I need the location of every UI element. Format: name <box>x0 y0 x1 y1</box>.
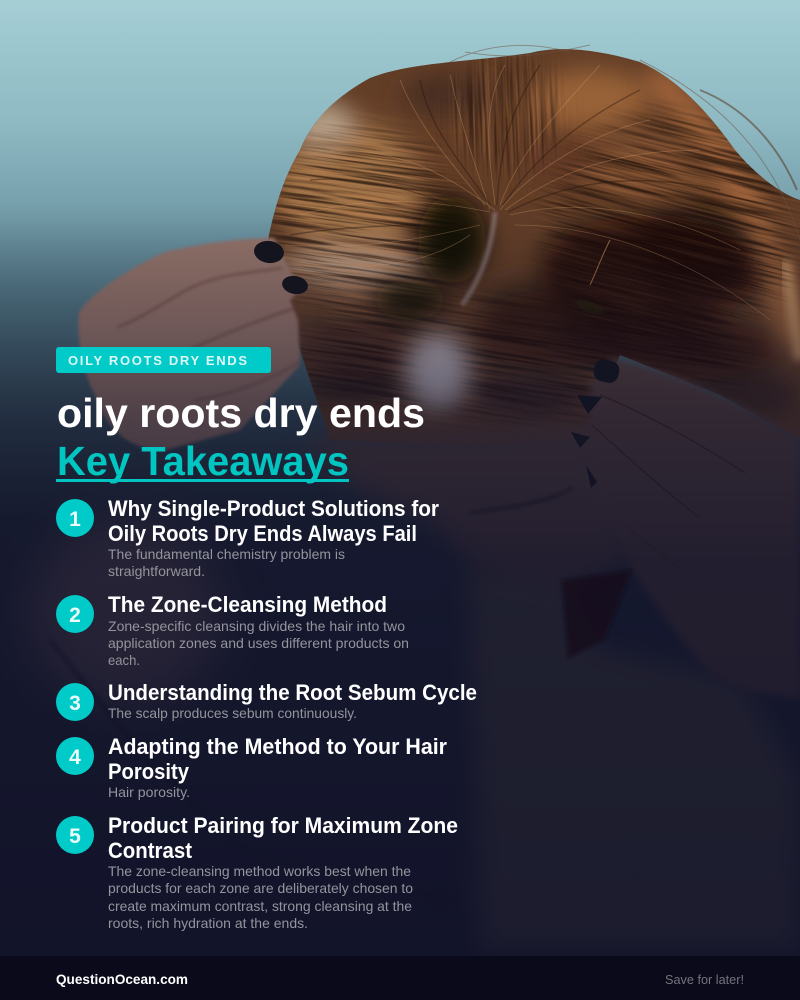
hair texture lower fan <box>300 295 742 418</box>
takeaway 5: create maximum contrast, strong cleansing at the <box>108 898 412 914</box>
crown shadow, parting and grey patch <box>374 196 495 410</box>
takeaway 3 <box>56 680 477 721</box>
takeaway 3: 3 <box>69 692 81 715</box>
takeaway 2: 2 <box>69 604 81 627</box>
right hand <box>582 358 800 700</box>
neck shadow <box>562 570 632 658</box>
takeaway 5: 5 <box>69 825 81 848</box>
takeaway 2 <box>56 592 409 668</box>
painted nails <box>253 239 621 488</box>
title: Key Takeaways <box>57 438 349 484</box>
takeaway 4: Porosity <box>108 759 190 784</box>
left hand <box>78 238 300 450</box>
takeaway 1: Why Single-Product Solutions for <box>108 496 439 521</box>
takeaway 1: The fundamental chemistry problem is <box>108 546 345 562</box>
footer bar: Save for later! <box>665 972 744 987</box>
takeaway 3: The scalp produces sebum continuously. <box>108 705 357 721</box>
takeaway 3: Understanding the Root Sebum Cycle <box>108 680 477 705</box>
hair texture left fan <box>268 118 458 320</box>
takeaway 1: straightforward. <box>108 563 205 579</box>
takeaway 2: The Zone-Cleansing Method <box>108 592 387 617</box>
takeaway 2: each. <box>108 652 140 668</box>
takeaway 1: 1 <box>69 508 81 531</box>
footer bar <box>0 956 800 1000</box>
flyaway hairs <box>450 45 800 240</box>
takeaway 5: Contrast <box>108 838 193 863</box>
hair texture right fan <box>536 103 800 331</box>
takeaway 1: Oily Roots Dry Ends Always Fail <box>108 521 417 546</box>
takeaway 5: Product Pairing for Maximum Zone <box>108 813 458 838</box>
takeaway 2: Zone-specific cleansing divides the hair into two <box>108 618 405 634</box>
title: oily roots dry ends <box>57 390 425 436</box>
takeaway 5 <box>56 813 458 931</box>
hair <box>268 49 800 440</box>
footer bar: QuestionOcean.com <box>56 971 188 987</box>
takeaway 4 <box>56 734 447 800</box>
takeaway 4: 4 <box>69 746 81 769</box>
deep shadow areas in hair <box>290 215 780 380</box>
category badge <box>56 347 271 373</box>
takeaway 2: application zones and uses different products on <box>108 635 409 651</box>
takeaway 5: The zone-cleansing method works best when the <box>108 863 411 879</box>
loose strands <box>285 65 770 320</box>
takeaway 5: roots, rich hydration at the ends. <box>108 915 308 931</box>
blurred lower left arm and shirt <box>30 525 800 950</box>
takeaway 1 <box>56 496 439 579</box>
takeaway 4: Adapting the Method to Your Hair <box>108 734 447 759</box>
title <box>56 390 425 484</box>
takeaway 5: products for each zone are deliberately chosen to <box>108 880 413 896</box>
category badge: OILY ROOTS DRY ENDS <box>68 353 247 368</box>
face and hair fade <box>300 425 630 590</box>
takeaway 4: Hair porosity. <box>108 784 190 800</box>
hair texture top fan <box>449 54 566 181</box>
